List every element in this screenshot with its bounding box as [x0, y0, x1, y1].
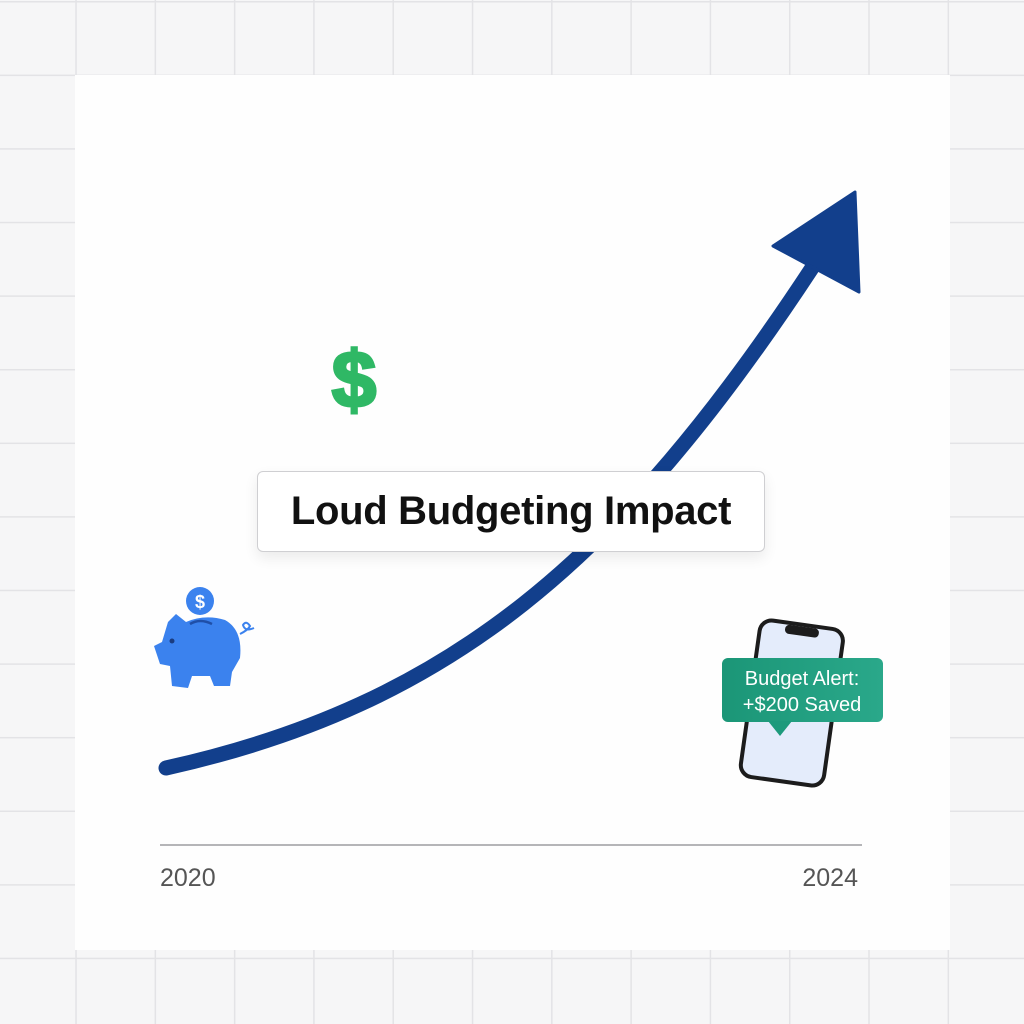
icon: smartphone [739, 619, 844, 787]
icon: dollar sign: $ [332, 335, 376, 424]
axis line [160, 844, 862, 846]
title [257, 471, 765, 552]
axis label 2024: 2024 [802, 864, 858, 892]
panel: chart card [75, 75, 950, 950]
title: Loud Budgeting Impact [291, 489, 731, 533]
curve [166, 268, 812, 768]
callout: budget alert [722, 658, 883, 736]
arrowhead [773, 192, 859, 292]
icon: piggy bank: $ [195, 592, 205, 612]
callout: budget alert: Budget Alert: [745, 668, 859, 690]
callout: budget alert: +$200 Saved [743, 694, 861, 716]
axis label 2020: 2020 [160, 864, 216, 892]
icon: piggy bank [154, 587, 254, 688]
